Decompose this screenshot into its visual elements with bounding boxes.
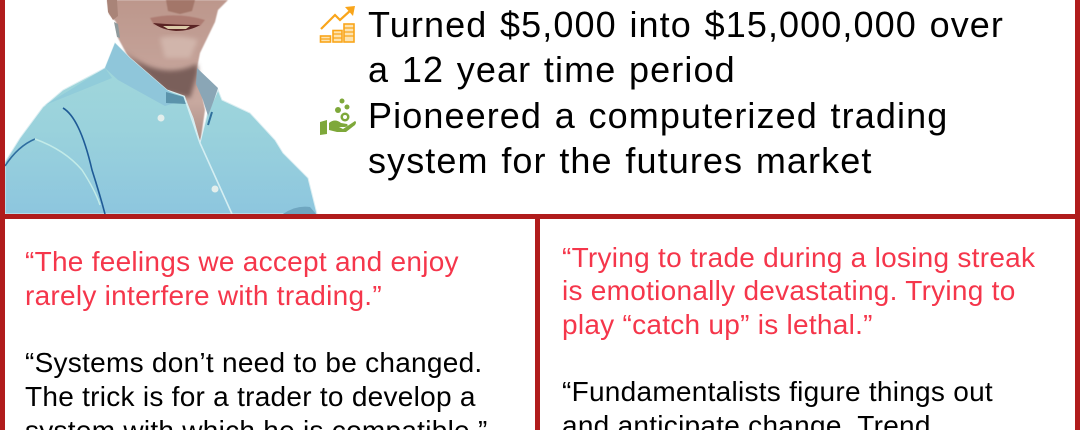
neck and face skin <box>107 0 228 145</box>
text: “Trying to trade during a losing streak <box>562 242 1035 273</box>
text: play “catch up” is lethal.” <box>562 309 873 340</box>
text: system for the futures market <box>368 140 872 181</box>
achievements text <box>368 4 1004 181</box>
text: “Fundamentalists figure things out <box>562 376 993 407</box>
text: a 12 year time period <box>368 49 736 90</box>
portrait of the trader <box>5 0 318 214</box>
text: Turned $5,000 into $15,000,000 over <box>368 4 1004 45</box>
panel: left quotes <box>25 246 488 430</box>
text: “Systems don’t need to be changed. <box>25 347 482 378</box>
icon: rising chart with coins <box>320 6 355 43</box>
text: “The feelings we accept and enjoy <box>25 246 459 277</box>
text: rarely interfere with trading.” <box>25 280 382 311</box>
icon: hand holding coins <box>320 98 356 135</box>
text: Pioneered a computerized trading <box>368 95 948 136</box>
text: is emotionally devastating. Trying to <box>562 275 1016 306</box>
panel: right quotes <box>562 242 1035 430</box>
text: The trick is for a trader to develop a <box>25 381 476 412</box>
shirt <box>5 43 317 214</box>
